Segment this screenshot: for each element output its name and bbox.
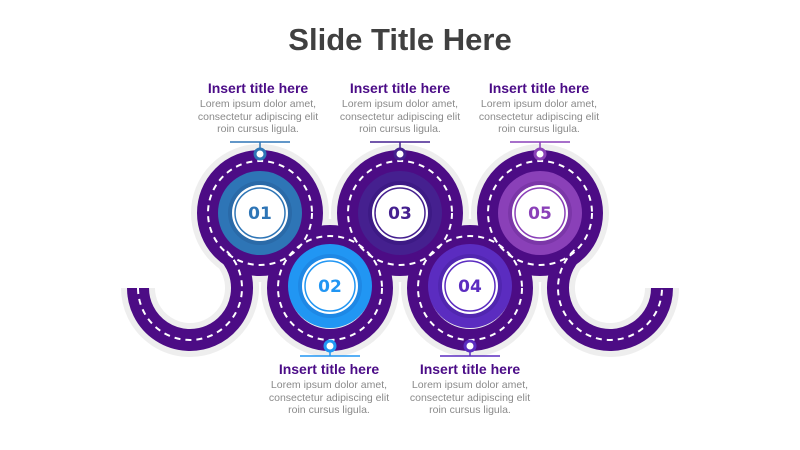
text block 05: consectetur adipiscing elit [479, 110, 599, 122]
title: Slide Title Here [288, 22, 512, 57]
text block 02: Insert title here [279, 361, 379, 377]
text block 04: consectetur adipiscing elit [410, 392, 530, 404]
text block 02 [269, 361, 390, 416]
medallion 04 [428, 244, 512, 328]
medallion 01: 01 [248, 204, 272, 224]
text block 02: roin cursus ligula. [288, 404, 370, 416]
text block 05: roin cursus ligula. [498, 123, 580, 135]
medallion 02 [288, 244, 372, 328]
text block 04: roin cursus ligula. [429, 404, 511, 416]
text block 05: Insert title here [489, 80, 589, 96]
text block 05: Lorem ipsum dolor amet, [481, 98, 597, 110]
text block 01: roin cursus ligula. [217, 123, 299, 135]
medallion 05: 05 [528, 204, 552, 224]
text block 01: Lorem ipsum dolor amet, [200, 98, 316, 110]
text block 03: roin cursus ligula. [359, 123, 441, 135]
text block 03: Insert title here [350, 80, 450, 96]
text block 03 [340, 80, 460, 135]
medallion 01 [218, 171, 302, 255]
medallion 02: 02 [318, 277, 342, 297]
medallion 03 [358, 171, 442, 255]
text block 04 [410, 361, 530, 416]
text block 04: Insert title here [420, 361, 520, 377]
text block 01 [198, 80, 318, 135]
text block 02: Lorem ipsum dolor amet, [271, 379, 387, 391]
pins [230, 142, 570, 356]
medallion 05 [498, 171, 582, 255]
text block 01: consectetur adipiscing elit [198, 110, 318, 122]
text block 05 [479, 80, 600, 135]
text block 03: Lorem ipsum dolor amet, [342, 98, 458, 110]
text block 04: Lorem ipsum dolor amet, [412, 379, 528, 391]
text block 01: Insert title here [208, 80, 308, 96]
text block 02: consectetur adipiscing elit [269, 392, 389, 404]
text block 03: consectetur adipiscing elit [340, 110, 460, 122]
medallion 03: 03 [388, 204, 412, 224]
medallion 04: 04 [458, 277, 482, 297]
